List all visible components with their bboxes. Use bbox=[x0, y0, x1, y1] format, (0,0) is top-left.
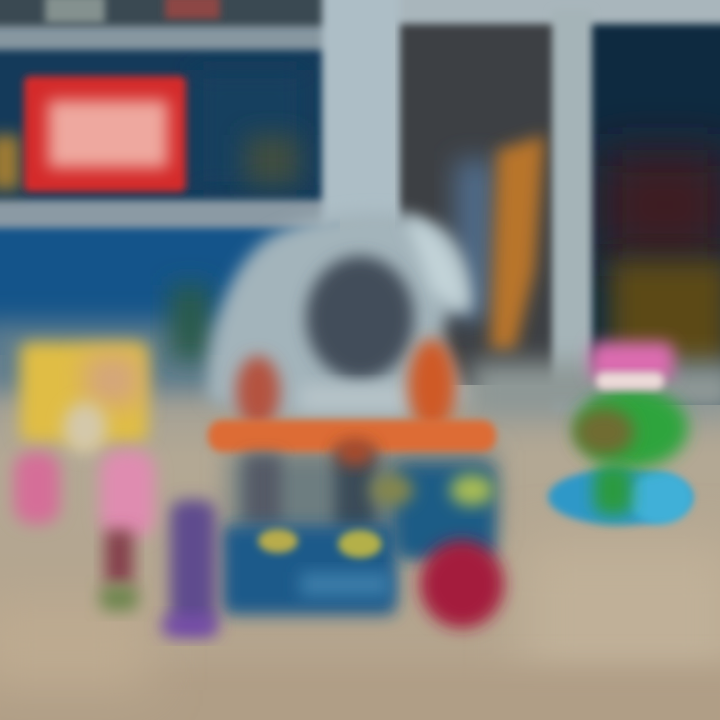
grey ring structure bbox=[208, 212, 471, 416]
shelving: left unit bbox=[0, 0, 340, 392]
purple figure bbox=[162, 500, 218, 637]
toy stack: blue base with coloured buttons bbox=[222, 465, 495, 615]
toy stack: posts and orange bar bbox=[208, 339, 496, 540]
tall grey column bbox=[322, 0, 400, 225]
shelving: right unit bbox=[390, 0, 720, 418]
red ball bbox=[420, 540, 504, 628]
green frog toy with pink bow bbox=[548, 342, 692, 525]
floor bbox=[0, 370, 720, 720]
red box on shelf bbox=[24, 76, 186, 192]
yellow and pink toy on the left bbox=[14, 342, 155, 611]
